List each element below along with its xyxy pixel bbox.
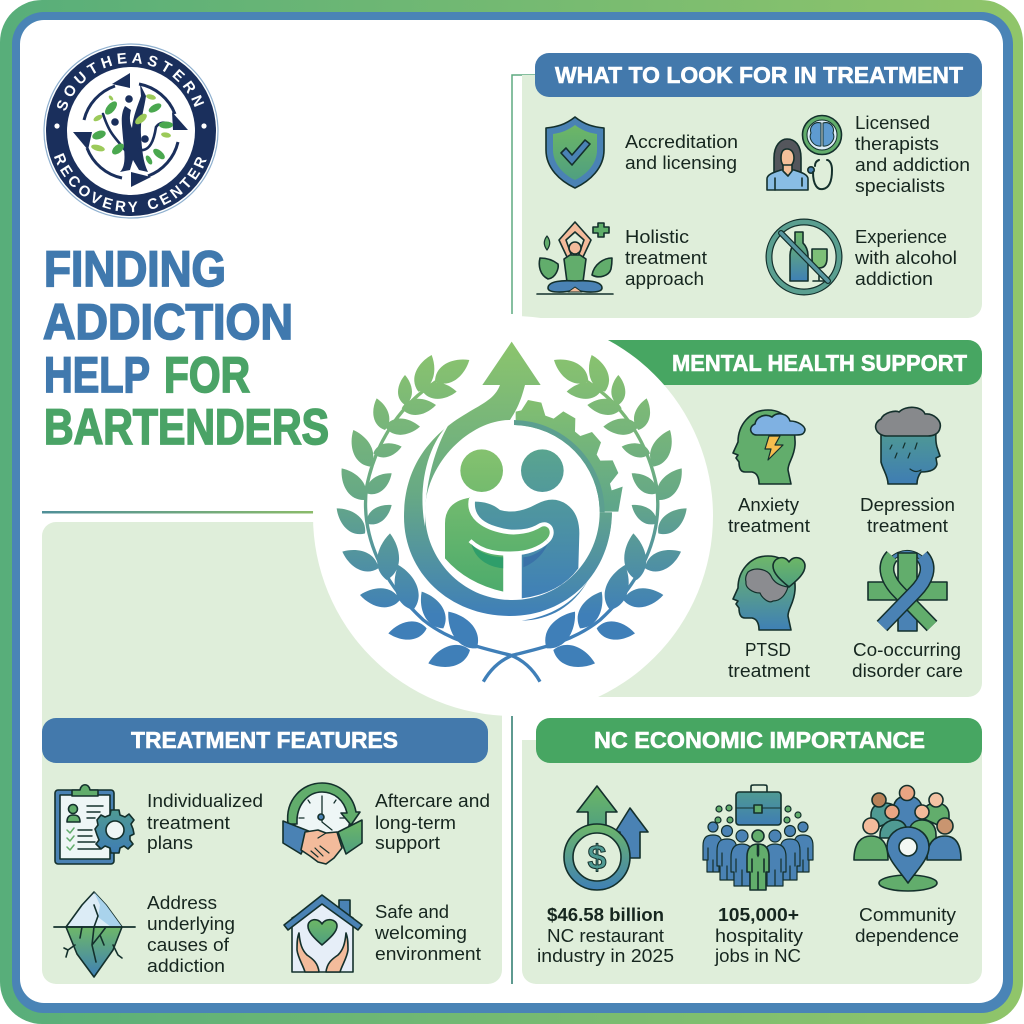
text: co-occurring disorder care [852, 640, 963, 681]
text: safe and welcoming environment [374, 902, 481, 964]
icon: yoga person [537, 222, 613, 294]
text: PTSD treatment: PTSD [745, 640, 791, 660]
central white disc [313, 316, 713, 716]
heading: NC economic importance: NC ECONOMIC IMPORTANCE [594, 727, 925, 753]
text: 105,000+ hospitality jobs in NC [714, 905, 803, 966]
panel: mental health support [560, 340, 982, 697]
text: $46.58 billion NC restaurant industry in 2025 [537, 905, 674, 966]
connector line: top right [512, 75, 535, 314]
logo: Southeastern Recovery Center: SOUTHEASTERN [57, 52, 204, 110]
text: holistic treatment approach: Holistic [625, 227, 689, 247]
text: $46.58 billion NC restaurant industry in 2025: industry in 2025 [537, 946, 674, 966]
heading: mental health support [560, 340, 982, 385]
text: community dependence: dependence [855, 926, 959, 946]
text: PTSD treatment [728, 640, 810, 681]
text: 105,000+ hospitality jobs in NC: hospitality [715, 926, 803, 946]
icon: depression head [876, 407, 940, 484]
text: individualized treatment plans: plans [147, 833, 193, 853]
text: community dependence [855, 905, 959, 946]
text: anxiety treatment: treatment [728, 516, 810, 536]
icon: PTSD head and heart [733, 556, 805, 630]
text: address underlying causes of addiction: underlying [147, 914, 235, 934]
icon: briefcase and workforce [703, 785, 813, 890]
title: ADDICTION [43, 294, 293, 350]
recovery ring and arrow [404, 342, 612, 621]
text: individualized treatment plans: Individualized [147, 791, 263, 811]
text: individualized treatment plans [147, 791, 263, 853]
text: licensed therapists and addiction specialists: specialists [855, 176, 945, 196]
text: accreditation and licensing: and licensing [625, 153, 737, 173]
text: depression treatment: Depression [860, 495, 955, 515]
title: BARTENDERS [44, 399, 329, 455]
heading: mental health support: MENTAL HEALTH SUPPORT [672, 350, 968, 376]
text: experience with alcohol addiction: with alcohol [854, 248, 957, 268]
central emblem [330, 342, 693, 682]
heading: NC economic importance [536, 718, 982, 763]
text: experience with alcohol addiction: addiction [855, 269, 933, 289]
text: experience with alcohol addiction: Experience [855, 227, 947, 247]
icon: community pin [854, 786, 961, 891]
panel: what to look for in treatment [522, 53, 982, 318]
divider line: left [42, 511, 314, 514]
text: $46.58 billion NC restaurant industry in 2025: $46.58 billion [547, 905, 664, 925]
text: safe and welcoming environment: environment [375, 944, 481, 964]
title [43, 241, 329, 455]
icon: no alcohol [769, 222, 839, 292]
text: aftercare and long-term support: long-term [375, 813, 456, 833]
text: depression treatment: treatment [867, 516, 948, 536]
icon: anxiety head [733, 410, 805, 484]
icon: shield check [546, 117, 604, 188]
gear [516, 400, 623, 512]
icon: co-occurring ribbon and cross [868, 552, 947, 631]
text: 105,000+ hospitality jobs in NC: jobs in NC [714, 946, 801, 966]
text: aftercare and long-term support [375, 791, 490, 853]
text: 105,000+ hospitality jobs in NC: 105,000+ [718, 905, 799, 925]
text: depression treatment [860, 495, 955, 536]
text: holistic treatment approach: approach [625, 269, 704, 289]
text: PTSD treatment: treatment [728, 661, 810, 681]
panel: NC economic importance [522, 718, 982, 984]
icon: clipboard and gear [55, 785, 134, 864]
text: licensed therapists and addiction specialists [855, 113, 970, 196]
text: accreditation and licensing: Accreditation [625, 132, 738, 152]
icon: house with heart and hands [284, 895, 362, 972]
text: licensed therapists and addiction specialists: Licensed [855, 113, 930, 133]
text: address underlying causes of addiction: Address [147, 893, 217, 913]
logo: Southeastern Recovery Center [43, 43, 219, 219]
logo: Southeastern Recovery Center: RECOVERY CENTER [54, 153, 207, 212]
text: safe and welcoming environment: welcoming [374, 923, 467, 943]
text: licensed therapists and addiction specialists: and addiction [855, 155, 970, 175]
text: individualized treatment plans: treatment [147, 813, 230, 833]
text: address underlying causes of addiction: addiction [147, 956, 225, 976]
icon: dollar coin with arrows: $ [588, 839, 607, 877]
title: HELP [44, 347, 150, 403]
text: address underlying causes of addiction: causes of [147, 935, 230, 955]
heading: treatment features: TREATMENT FEATURES [131, 727, 398, 753]
heading: treatment features [42, 718, 488, 763]
text: safe and welcoming environment: Safe and [375, 902, 449, 922]
title: FINDING [44, 241, 226, 297]
icon: iceberg with roots [54, 892, 135, 977]
title: FOR [164, 347, 250, 403]
icon: dollar coin with arrows [564, 786, 648, 890]
text: aftercare and long-term support: Aftercare and [375, 791, 490, 811]
text: co-occurring disorder care: Co-occurring [853, 640, 961, 660]
icon: two people hugging [445, 449, 579, 598]
text: holistic treatment approach: treatment [625, 248, 707, 268]
icon: doctor with brain and stethoscope [767, 116, 842, 190]
text: accreditation and licensing [625, 132, 738, 173]
text: $46.58 billion NC restaurant industry in 2025: NC restaurant [547, 926, 664, 946]
laurel wreath [330, 350, 693, 682]
connector line: bottom [511, 710, 513, 984]
text: licensed therapists and addiction specialists: therapists [855, 134, 939, 154]
text: experience with alcohol addiction [854, 227, 957, 289]
heading: what to look for in treatment [535, 53, 982, 97]
text: anxiety treatment: Anxiety [738, 495, 799, 515]
text: aftercare and long-term support: support [375, 833, 440, 853]
panel: treatment features [42, 522, 502, 984]
text: anxiety treatment [728, 495, 810, 536]
text: co-occurring disorder care: disorder care [852, 661, 963, 681]
icon: clock and handshake [283, 783, 362, 864]
heading: what to look for in treatment: WHAT TO LOOK FOR IN TREATMENT [555, 62, 964, 88]
text: community dependence: Community [859, 905, 956, 925]
text: holistic treatment approach [625, 227, 707, 289]
text: address underlying causes of addiction [147, 893, 235, 976]
